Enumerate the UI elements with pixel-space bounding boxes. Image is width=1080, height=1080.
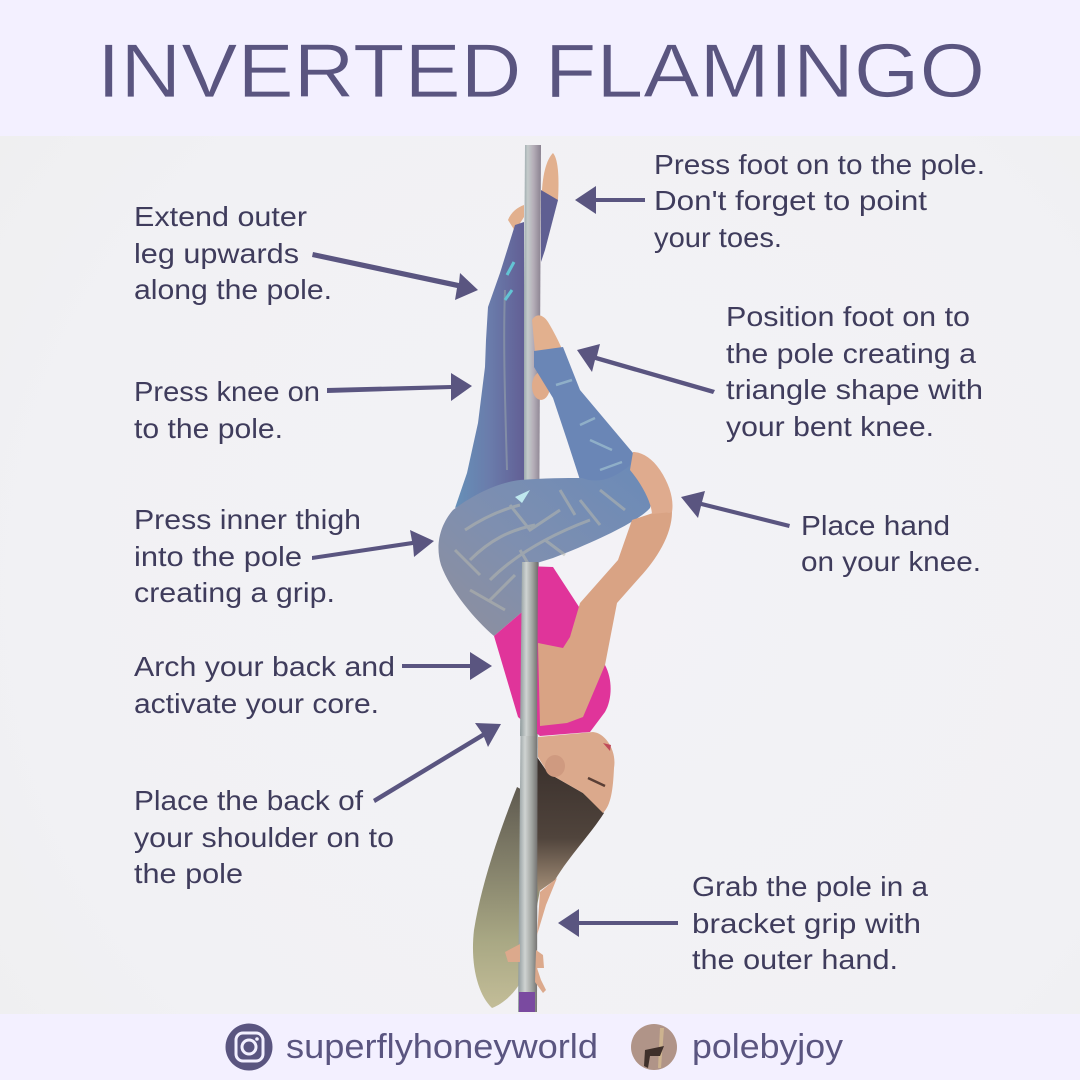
- callout: back of shoulder: your shoulder on to: [134, 822, 394, 853]
- icon: avatar: [631, 1024, 677, 1070]
- callout: inner thigh: [134, 504, 361, 608]
- arrow: press foot: [575, 186, 645, 214]
- callout: back of shoulder: [134, 785, 394, 889]
- callout: extend leg: Extend outer: [134, 201, 307, 232]
- arm and shoulder: [538, 512, 672, 726]
- heel: [532, 372, 550, 400]
- callout: extend leg: leg upwards: [134, 238, 299, 269]
- callout: back of shoulder: Place the back of: [134, 785, 363, 816]
- arrow: bracket grip: [558, 909, 678, 937]
- callout: bracket grip: bracket grip with: [692, 908, 921, 939]
- callout: inner thigh: into the pole: [134, 541, 302, 572]
- bent foot: [532, 315, 562, 352]
- upper pole: [522, 145, 541, 570]
- callout: press foot: Don't forget to point: [654, 185, 927, 216]
- lips: [603, 743, 611, 751]
- callout: arch back: activate your core.: [134, 688, 379, 719]
- callout: place hand: on your knee.: [801, 546, 981, 577]
- pink top: [494, 566, 611, 736]
- callout: bracket grip: [692, 871, 928, 975]
- arrow: press knee: [327, 373, 472, 401]
- callout: inner thigh: Press inner thigh: [134, 504, 361, 535]
- callout: position foot: the pole creating a: [726, 338, 976, 369]
- callout: back of shoulder: the pole: [134, 858, 243, 889]
- upper hand: [630, 452, 672, 514]
- callout: position foot: [726, 301, 983, 442]
- arrow: position foot: [577, 344, 715, 394]
- footer band: [0, 1014, 1080, 1080]
- thigh sparkle: [515, 490, 530, 503]
- leg seam: [504, 290, 507, 470]
- dark hair near head: [533, 757, 604, 892]
- callout: bracket grip: Grab the pole in a: [692, 871, 928, 902]
- arrow: inner thigh: [312, 530, 434, 560]
- head: [538, 732, 614, 813]
- upper foot: [542, 153, 558, 212]
- lower pole: [518, 560, 538, 1012]
- photo: performer on pole: [438, 145, 672, 1012]
- icon: instagram: [226, 1024, 272, 1070]
- callout: press foot: [654, 149, 985, 253]
- header band: [0, 0, 1080, 136]
- handle: superflyhoneyworld: superflyhoneyworld: [286, 1028, 598, 1066]
- arrow: arch back: [402, 652, 492, 680]
- callout: press knee: to the pole.: [134, 413, 283, 444]
- lower hand: [505, 944, 546, 993]
- callout: arch back: [134, 651, 395, 719]
- callout: position foot: your bent knee.: [726, 411, 934, 442]
- callout: press knee: [134, 376, 320, 444]
- extended leg: [455, 222, 524, 508]
- callout: press knee: Press knee on: [134, 376, 320, 407]
- upper foot sleeve: [541, 190, 558, 262]
- long hair: [473, 787, 540, 1008]
- title: INVERTED FLAMINGO: [97, 29, 985, 114]
- callout: position foot: triangle shape with: [726, 374, 983, 405]
- callout: inner thigh: creating a grip.: [134, 577, 335, 608]
- callout: place hand: Place hand: [801, 510, 950, 541]
- ear: [545, 755, 565, 777]
- callout: extend leg: [134, 201, 332, 305]
- leg highlight: [505, 262, 514, 300]
- callout: bracket grip: the outer hand.: [692, 944, 898, 975]
- calf pattern: [556, 380, 622, 470]
- bent calf: [534, 347, 650, 507]
- callout: extend leg: along the pole.: [134, 274, 332, 305]
- legging scale pattern: [455, 490, 625, 610]
- callout: position foot: Position foot on to: [726, 301, 970, 332]
- handle: polebyjoy: polebyjoy: [692, 1028, 843, 1066]
- arrow: back of shoulder: [373, 723, 501, 803]
- lower forearm: [537, 878, 557, 935]
- callout: press foot: Press foot on to the pole.: [654, 149, 985, 180]
- callout: press foot: your toes.: [654, 222, 782, 253]
- pole base: [519, 992, 535, 1012]
- arrow: place hand: [681, 491, 790, 528]
- arrow: extend leg: [312, 252, 478, 300]
- pole over top: [520, 562, 538, 736]
- thigh and hip: [438, 460, 651, 636]
- callout: place hand: [801, 510, 981, 577]
- callout: arch back: Arch your back and: [134, 651, 395, 682]
- upper toes: [508, 205, 524, 231]
- eye: [588, 778, 605, 786]
